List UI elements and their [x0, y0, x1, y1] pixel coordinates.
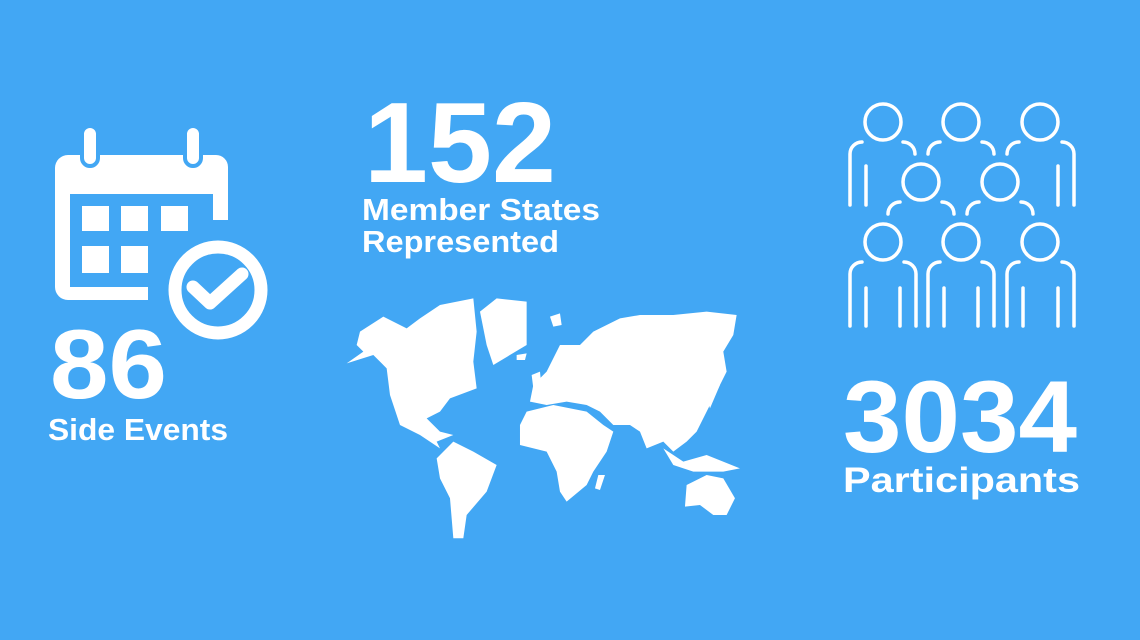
stat: side events: Side Events — [48, 412, 228, 447]
stat: member states: 152 — [364, 80, 556, 207]
icon: calendar with check — [55, 126, 268, 340]
stat: participants: Participants — [843, 461, 1080, 500]
stat: side events: 86 — [50, 309, 167, 419]
stat: participants: 3034 — [843, 360, 1077, 474]
icon: group of people — [850, 104, 1074, 326]
stat: member states: Member States — [362, 192, 600, 227]
stat: member states: Represented — [362, 224, 559, 259]
stat: side events — [48, 309, 228, 447]
world map — [347, 298, 740, 538]
stat: member states — [362, 80, 600, 259]
